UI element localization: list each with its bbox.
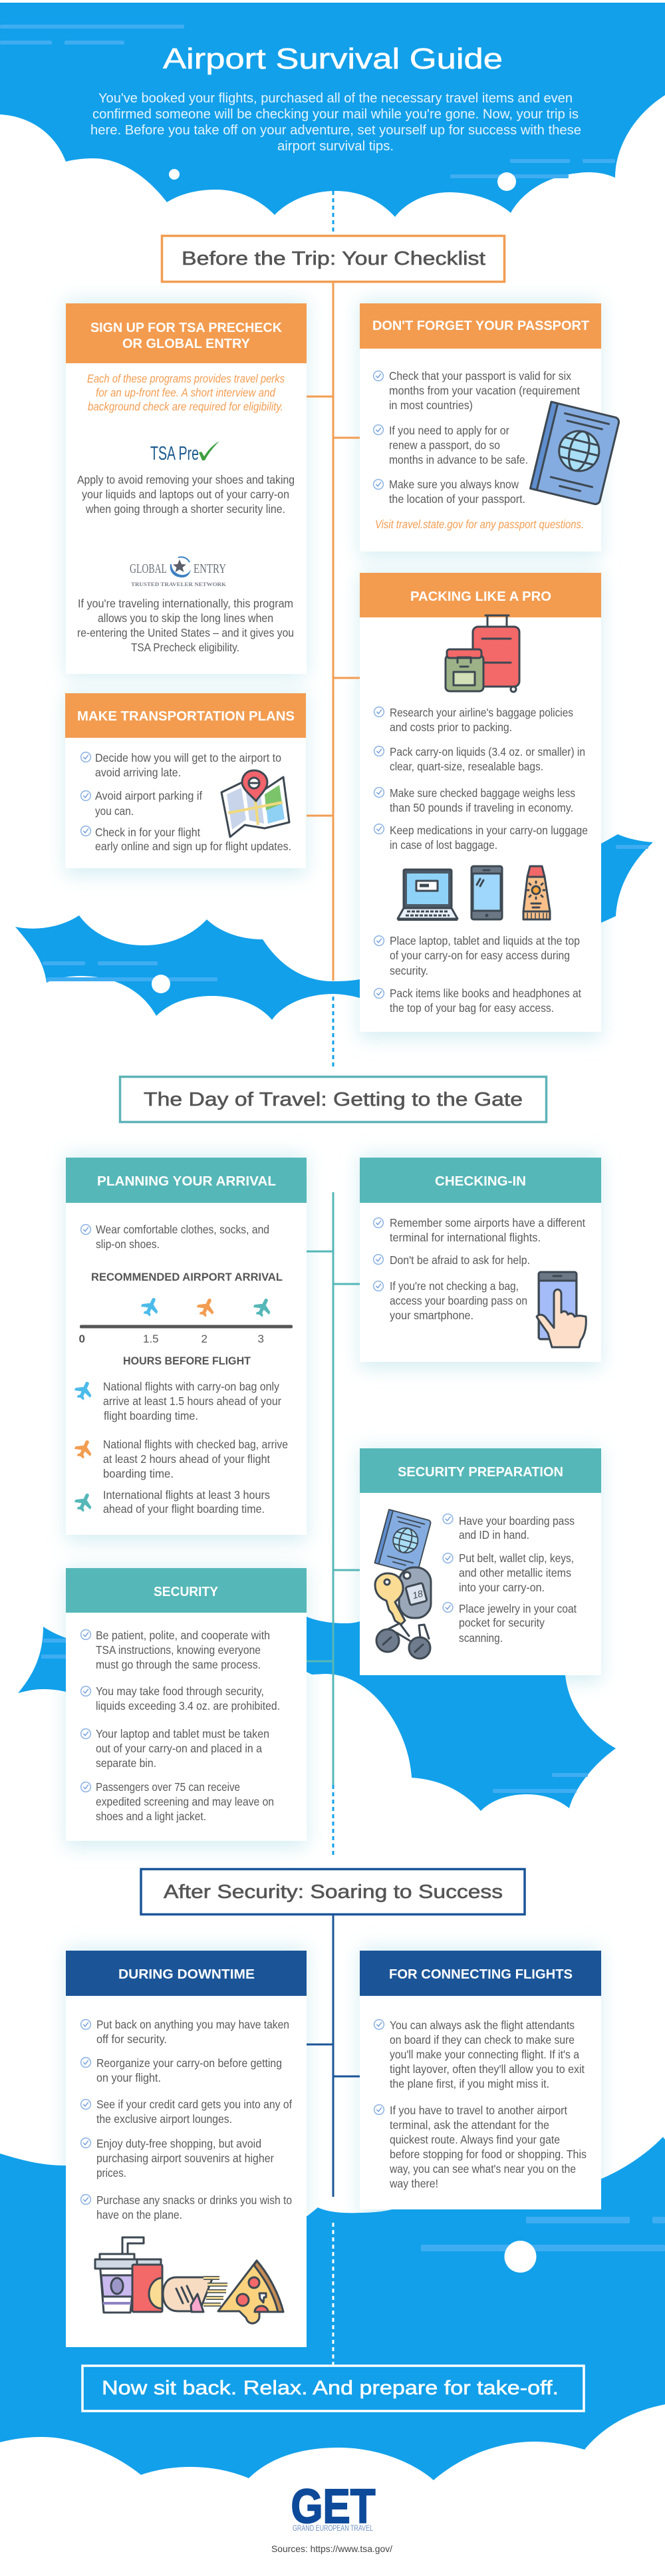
Global Entry description: allows you to skip the long lines when bbox=[98, 611, 273, 625]
icon: snacks and drinks bbox=[95, 2237, 283, 2323]
TSA Pre description: your liquids and laptops out of your carry-on bbox=[82, 488, 289, 501]
legend: carry-on: flight boarding time. bbox=[104, 1409, 198, 1422]
panel: Don't Forget Your Passport bbox=[360, 303, 620, 552]
bullet: food and liquids bbox=[81, 1685, 280, 1712]
bullet: laptop and tablet: separate bin. bbox=[96, 1756, 156, 1770]
bullet: food and liquids: You may take food through security, bbox=[96, 1685, 264, 1698]
bullet: laptop and tablet: out of your carry-on and placed in a bbox=[96, 1742, 262, 1755]
legend: carry-on: arrive at least 1.5 hours ahead of your bbox=[103, 1394, 281, 1408]
heading: The Day of Travel bbox=[120, 1076, 547, 1122]
panel: Security Preparation bbox=[360, 1448, 601, 1675]
title: Airport Survival Guide bbox=[163, 43, 503, 75]
bullet: flight attendants: on board if they can check to make sure bbox=[390, 2033, 575, 2046]
bullet: baggage policies bbox=[374, 706, 573, 734]
panel: Checking-In bbox=[66, 1158, 601, 2554]
logo: Global Entry bbox=[130, 557, 226, 587]
bullet: flight attendants: You can always ask the flight attendants bbox=[390, 2018, 575, 2032]
bullet: be patient: Be patient, polite, and cooperate with bbox=[96, 1629, 270, 1642]
bullet: checked weight: than 50 pounds if traveling in economy. bbox=[390, 801, 573, 814]
intro paragraph: airport survival tips. bbox=[277, 139, 394, 154]
bullet: reorganize: Reorganize your carry-on before getting bbox=[96, 2056, 282, 2070]
bullet: top of carry-on: Place laptop, tablet and liquids at the top bbox=[390, 934, 580, 947]
TSA Pre description: Apply to avoid removing your shoes and taking bbox=[77, 473, 295, 486]
bullet: boarding pass and ID bbox=[443, 1514, 575, 1541]
bullet: put back on: off for security. bbox=[96, 2032, 167, 2046]
legend: international: ahead of your flight boarding time. bbox=[103, 1502, 265, 1516]
italic note: background check are required for eligibility. bbox=[88, 400, 283, 413]
chart: recommended airport arrival timeline: RECOMMENDED AIRPORT ARRIVAL bbox=[91, 1271, 283, 1283]
intro paragraph: here. Before you take off on your adventure, set yourself up for success with these bbox=[90, 123, 581, 138]
bullet: terminals: terminal for international flights. bbox=[390, 1231, 541, 1244]
bullet: check in: early online and sign up for flight updates. bbox=[95, 840, 291, 853]
panel: During Downtime: DURING DOWNTIME bbox=[118, 1967, 255, 1982]
bullet: avoid parking bbox=[81, 789, 202, 818]
bullet: boarding pass and ID: Have your boarding pass bbox=[459, 1514, 575, 1528]
icon: passport, keys and sunglasses bbox=[374, 1510, 431, 1659]
intro paragraph: confirmed someone will be checking your mail while you're gone. Now, your trip is bbox=[92, 107, 579, 122]
bullet: liquids: Pack carry-on liquids (3.4 oz. or smaller) in bbox=[390, 745, 585, 758]
bullet: check in: Check in for your flight bbox=[95, 826, 200, 839]
bullet: snacks: have on the plane. bbox=[96, 2208, 182, 2221]
Global Entry description: re-entering the United States – and it gives you bbox=[77, 626, 294, 639]
bullet: decide how: avoid arriving late. bbox=[95, 766, 181, 779]
legend: checked bag: at least 2 hours ahead of your flight bbox=[103, 1452, 270, 1466]
bullet: passengers over 75: expedited screening and may leave on bbox=[96, 1795, 274, 1808]
icon: hand holding phone bbox=[537, 1272, 586, 1347]
bullet: validity bbox=[374, 369, 580, 412]
bullet: credit card lounges: See if your credit card gets you into any of bbox=[96, 2098, 292, 2111]
bullet: check in bbox=[81, 826, 291, 853]
panel: Security Preparation: SECURITY PREPARATION bbox=[398, 1464, 563, 1480]
icon: map with pin bbox=[221, 770, 289, 837]
bullet: top of carry-on: of your carry-on for easy access during bbox=[390, 949, 570, 962]
logo: Global Entry: GLOBAL bbox=[130, 562, 167, 576]
intro paragraph bbox=[90, 91, 581, 154]
chart: recommended airport arrival timeline: HOURS BEFORE FLIGHT bbox=[123, 1355, 251, 1367]
TSA Pre description bbox=[77, 473, 295, 516]
panel: Don't Forget Your Passport: DON'T FORGET YOUR PASSPORT bbox=[372, 318, 589, 333]
icon: smartphone bbox=[471, 866, 502, 919]
bullet: avoid parking: Avoid airport parking if bbox=[95, 789, 202, 802]
bullet: validity: in most countries) bbox=[389, 399, 473, 412]
chart: recommended airport arrival timeline: 2 bbox=[201, 1333, 207, 1345]
bullet: belt and keys: Put belt, wallet clip, keys, bbox=[459, 1551, 574, 1565]
bullet: baggage policies: and costs prior to packing. bbox=[390, 721, 512, 734]
bullet: food and liquids: liquids exceeding 3.4 oz. are prohibited. bbox=[96, 1699, 280, 1712]
cloud band: middle of checklist bbox=[15, 834, 653, 1020]
panel: Checking-In: CHECKING-IN bbox=[435, 1174, 526, 1189]
bullet: jewelry bbox=[443, 1602, 577, 1645]
header sky background bbox=[0, 3, 665, 217]
TSA Pre description: when going through a shorter security line. bbox=[85, 502, 285, 516]
logo: Global Entry: ENTRY bbox=[194, 562, 226, 576]
bullet: apply: months in advance to be safe. bbox=[389, 453, 528, 466]
bullet: terminals bbox=[374, 1216, 585, 1244]
bullet: decide how: Decide how you will get to the airport to bbox=[95, 751, 281, 764]
bullet: boarding pass: your smartphone. bbox=[390, 1309, 473, 1322]
icon: suitcase and backpack bbox=[446, 615, 519, 692]
bullet: location: Make sure you always know bbox=[389, 478, 519, 491]
bullet: put back on: Put back on anything you may have taken bbox=[96, 2018, 289, 2031]
bullet: another terminal: quickest route. Always find your gate bbox=[390, 2133, 560, 2146]
italic note: Visit travel.state.gov for any passport questions. bbox=[375, 518, 584, 531]
closing banner: Now sit back. Relax. And prepare for take-off. bbox=[102, 2377, 559, 2399]
bullet: apply bbox=[374, 424, 528, 466]
bullet: another terminal: way, you can see what's near you on the bbox=[389, 2162, 576, 2175]
bullet: checked weight bbox=[374, 786, 575, 814]
bullet: validity: months from your vacation (requirement bbox=[389, 384, 580, 397]
bullet: passengers over 75: Passengers over 75 can receive bbox=[96, 1780, 240, 1794]
heading: Before the Trip bbox=[162, 236, 504, 282]
bullet: avoid parking: you can. bbox=[95, 804, 134, 818]
bullet: jewelry: Place jewelry in your coat bbox=[459, 1602, 577, 1615]
bullet: duty-free: purchasing airport souvenirs at higher bbox=[96, 2152, 274, 2165]
bullet: passengers over 75 bbox=[81, 1780, 274, 1823]
logo: TSA Pre: TSA Pre bbox=[150, 443, 199, 464]
panel: Security: SECURITY bbox=[154, 1584, 218, 1599]
bullet: liquids: clear, quart-size, resealable bags. bbox=[390, 760, 543, 773]
legend: checked bag bbox=[73, 1438, 288, 1480]
bullet: credit card lounges: the exclusive airport lounges. bbox=[96, 2112, 232, 2126]
panel: TSA PreCheck or Global Entry bbox=[66, 303, 307, 674]
bullet: medications: in case of lost baggage. bbox=[390, 838, 497, 852]
bullet: belt and keys: and other metallic items bbox=[459, 1566, 571, 1579]
bullet: jewelry: pocket for security bbox=[459, 1616, 545, 1629]
bullet: another terminal: terminal, ask the attendant for the bbox=[390, 2118, 549, 2132]
chart: recommended airport arrival timeline: 3 bbox=[258, 1333, 264, 1345]
icon: laptop bbox=[398, 870, 458, 921]
bullet: boarding pass bbox=[374, 1279, 527, 1322]
bullet: comfortable clothes: Wear comfortable clothes, socks, and bbox=[96, 1223, 269, 1236]
chart: recommended airport arrival timeline: 0 bbox=[78, 1333, 85, 1345]
bullet: location: the location of your passport. bbox=[389, 492, 525, 506]
panel: For Connecting Flights: FOR CONNECTING FLIGHTS bbox=[389, 1967, 573, 1982]
italic note: Each of these programs provides travel perks bbox=[87, 372, 285, 385]
Global Entry description: TSA Precheck eligibility. bbox=[131, 641, 239, 654]
Global Entry description: If you're traveling internationally, this program bbox=[78, 597, 293, 610]
panel: TSA PreCheck or Global Entry: OR GLOBAL ENTRY bbox=[122, 336, 250, 351]
legend: international: International flights at least 3 hours bbox=[103, 1488, 270, 1502]
bullet: medications: Keep medications in your carry-on luggage bbox=[390, 824, 588, 837]
legend: international bbox=[73, 1488, 270, 1516]
bullet: put back on bbox=[81, 2018, 289, 2046]
bullet: flight attendants: you'll make your connecting flight. If it's a bbox=[390, 2048, 579, 2061]
bullet: be patient bbox=[81, 1629, 270, 1671]
bullet: snacks bbox=[81, 2193, 292, 2221]
bullet: books and headphones: Pack items like books and headphones at bbox=[390, 987, 581, 1000]
bullet: flight attendants: tight layover, often they'll allow you to exit bbox=[390, 2062, 585, 2076]
legend: carry-on bbox=[73, 1379, 281, 1422]
bullet: flight attendants bbox=[374, 2018, 585, 2090]
chart: recommended airport arrival timeline bbox=[78, 1271, 293, 1367]
footer sky background bbox=[0, 2137, 665, 2480]
logo: GET Grand European Travel: GET bbox=[291, 2480, 376, 2533]
panel: Packing Like a Pro: PACKING LIKE A PRO bbox=[410, 589, 551, 604]
bullet: boarding pass and ID: and ID in hand. bbox=[459, 1528, 529, 1541]
italic note: for an up-front fee. A short interview and bbox=[96, 386, 276, 399]
heading: The Day of Travel: The Day of Travel: Getting to the Gate bbox=[144, 1089, 523, 1110]
logo: GET Grand European Travel: GRAND EUROPEAN TRAVEL bbox=[293, 2523, 373, 2533]
chart: recommended airport arrival timeline: 1.5 bbox=[143, 1333, 159, 1345]
heading: Before the Trip: Before the Trip: Your Checklist bbox=[182, 248, 485, 269]
bullet: duty-free: Enjoy duty-free shopping, but avoid bbox=[96, 2137, 261, 2150]
bullet: ask for help: Don't be afraid to ask for help. bbox=[390, 1253, 530, 1267]
panel: Planning Your Arrival bbox=[66, 1158, 307, 1535]
panel: TSA PreCheck or Global Entry: SIGN UP FOR TSA PRECHECK bbox=[90, 320, 282, 335]
bullet: snacks: Purchase any snacks or drinks you wish to bbox=[96, 2193, 292, 2207]
bullet: another terminal: before stopping for food or shopping. This bbox=[390, 2148, 587, 2161]
panel: Planning Your Arrival: PLANNING YOUR ARRIVAL bbox=[97, 1174, 276, 1189]
italic note bbox=[87, 372, 285, 413]
bullet: duty-free bbox=[81, 2137, 274, 2179]
intro paragraph: You've booked your flights, purchased all of the necessary travel items and even bbox=[98, 91, 573, 106]
bullet: top of carry-on: security. bbox=[390, 964, 428, 977]
bullet: credit card lounges bbox=[81, 2098, 292, 2126]
dashed and solid connector lines bbox=[307, 191, 360, 2365]
bullet: books and headphones bbox=[374, 987, 581, 1015]
bullet: flight attendants: the plane first, if you might miss it. bbox=[390, 2077, 549, 2090]
bullet: duty-free: prices. bbox=[96, 2166, 126, 2179]
panel: Make Transportation Plans: MAKE TRANSPORTATION PLANS bbox=[77, 709, 295, 724]
bullet: belt and keys bbox=[443, 1551, 574, 1594]
bullet: be patient: TSA instructions, knowing everyone bbox=[96, 1643, 261, 1657]
bullet: boarding pass: access your boarding pass on bbox=[390, 1294, 527, 1307]
bullet: reorganize bbox=[81, 2056, 282, 2084]
panel: Packing Like a Pro bbox=[360, 573, 601, 1032]
heading: After Security: After Security: Soaring to Success bbox=[164, 1881, 503, 1903]
sources: Sources: https://www.tsa.gov/ bbox=[271, 2543, 392, 2554]
bullet: jewelry: scanning. bbox=[459, 1631, 503, 1645]
panel: For Connecting Flights bbox=[360, 1951, 601, 2209]
closing banner bbox=[82, 2366, 584, 2411]
legend: carry-on: National flights with carry-on bag only bbox=[103, 1380, 279, 1393]
panel: During Downtime bbox=[66, 1951, 307, 2347]
bullet: decide how bbox=[81, 751, 281, 779]
bullet: laptop and tablet: Your laptop and tablet must be taken bbox=[96, 1727, 269, 1740]
bullet: location bbox=[374, 478, 525, 506]
bullet: top of carry-on bbox=[374, 934, 580, 977]
bullet: another terminal: way there! bbox=[389, 2177, 438, 2190]
cloud band: security area bbox=[18, 1617, 616, 1811]
logo: Global Entry: TRUSTED TRAVELER NETWORK bbox=[131, 581, 226, 587]
bullet: another terminal: If you have to travel to another airport bbox=[390, 2104, 567, 2117]
bullet: comfortable clothes: slip-on shoes. bbox=[96, 1237, 160, 1251]
bullet: terminals: Remember some airports have a different bbox=[390, 1216, 585, 1229]
legend: checked bag: National flights with checked bag, arrive bbox=[103, 1438, 288, 1451]
Global Entry description bbox=[77, 597, 294, 654]
legend: checked bag: boarding time. bbox=[103, 1467, 174, 1480]
bullet: another terminal bbox=[374, 2104, 587, 2190]
bullet: comfortable clothes bbox=[81, 1223, 269, 1251]
bullet: be patient: must go through the same process. bbox=[96, 1658, 261, 1671]
bullet: books and headphones: the top of your bag for easy access. bbox=[390, 1001, 554, 1015]
bullet: laptop and tablet bbox=[81, 1727, 269, 1770]
heading: After Security bbox=[141, 1869, 525, 1915]
icon: sunscreen tube bbox=[523, 866, 550, 919]
bullet: liquids bbox=[374, 745, 585, 773]
bullet: checked weight: Make sure checked baggage weighs less bbox=[390, 786, 575, 800]
icon: passport bbox=[530, 402, 620, 505]
bullet: medications bbox=[374, 824, 588, 852]
bullet: boarding pass: If you're not checking a bag, bbox=[390, 1279, 519, 1293]
panel: Security bbox=[66, 1568, 307, 1841]
icon: passport, keys and sunglasses: 18 bbox=[411, 1588, 424, 1601]
bullet: validity: Check that your passport is valid for six bbox=[389, 369, 571, 383]
bullet: belt and keys: into your carry-on. bbox=[459, 1581, 545, 1594]
bullet: baggage policies: Research your airline's baggage policies bbox=[390, 706, 573, 719]
panel: Make Transportation Plans bbox=[65, 303, 620, 2554]
bullet: reorganize: on your flight. bbox=[96, 2071, 161, 2084]
card shadows bbox=[65, 301, 601, 2354]
bullet: apply: If you need to apply for or bbox=[389, 424, 509, 437]
bullet: apply: renew a passport, do so bbox=[389, 438, 500, 452]
bullet: passengers over 75: shoes and a light jacket. bbox=[96, 1810, 206, 1823]
